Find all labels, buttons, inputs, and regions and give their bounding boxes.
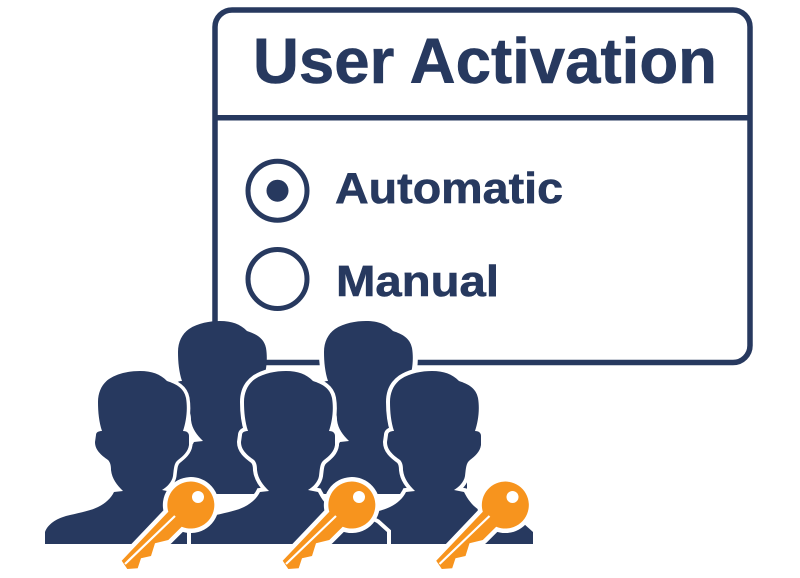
person: back left (174, 321, 267, 494)
label: Automatic: Automatic (335, 164, 563, 213)
icon: key middle (283, 482, 375, 569)
person: front left (45, 371, 241, 544)
person: front right (337, 371, 533, 544)
panel: user activation window (215, 10, 750, 362)
heading: User Activation: User Activation (253, 25, 717, 97)
radio: automatic selected (248, 161, 307, 220)
person: front middle (191, 371, 387, 544)
radio: manual unselected (248, 250, 307, 308)
icon: key right (436, 482, 529, 569)
person: back right (319, 321, 467, 494)
label: Manual: Manual (336, 257, 499, 306)
icon: key left (122, 482, 214, 569)
users group (45, 321, 533, 544)
